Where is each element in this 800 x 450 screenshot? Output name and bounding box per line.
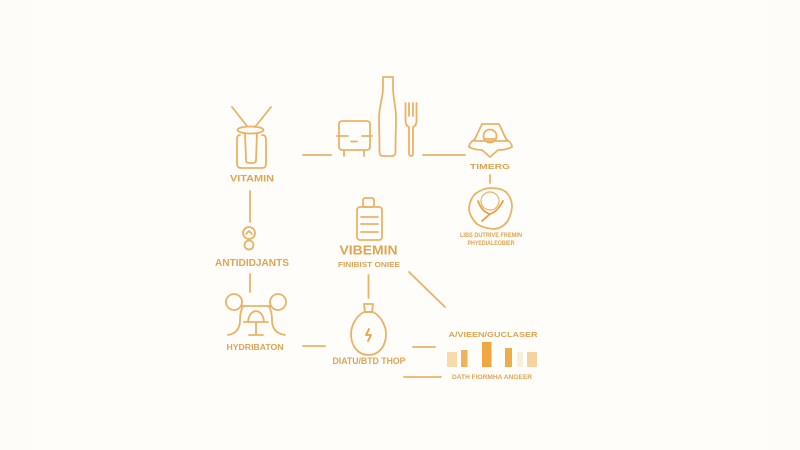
label: round icon caption: [460, 233, 522, 247]
label: round icon caption: LIBS DUTRIVE FREMIN: [460, 233, 522, 239]
label: bar chart caption: DATH FIORMHA ANGEER: [452, 374, 532, 381]
label: central heading: VIBEMIN: [340, 244, 398, 258]
icon: hydration table with round handles: [226, 294, 286, 335]
connector: fiber label to round icon: [489, 175, 491, 183]
icon: flask with bolt: [351, 304, 386, 355]
connector: hydration to flask: [303, 345, 325, 347]
icon: fork: [406, 103, 416, 156]
label: round icon caption: PHYEDIALEOBIER: [468, 241, 515, 247]
connector: flask to bar chart: [413, 346, 435, 348]
label: bar chart title: A/VIEEN/GUCLASER: [448, 330, 538, 339]
icon: food cover badge: [469, 124, 512, 157]
label: antioxidants: ANTIDIDJANTS: [215, 257, 289, 269]
connector: vitamin to robot: [303, 154, 331, 156]
icon: square food box: [337, 121, 372, 156]
connector: lower line to bar chart caption: [404, 376, 441, 378]
connector: diagonal to bar chart: [409, 272, 445, 307]
connector: fork to hat: [423, 154, 465, 156]
label: vitamin: VITAMIN: [230, 174, 274, 184]
icon: round organic shape with bird: [469, 188, 512, 229]
connector: vitamin to antioxidants: [249, 191, 251, 222]
icon: antioxidants molecule: [243, 227, 255, 250]
icon: vitamin drink glass with straws: [232, 107, 271, 168]
label: central subheading: FINIBIST ONIEE: [338, 260, 400, 269]
icon: bottle: [379, 77, 396, 156]
bar chart: [447, 342, 537, 367]
label: hydration: HYDRIBATON: [226, 343, 284, 352]
connector: antioxidants to hydration: [249, 274, 251, 292]
label: fiber: TIMERG: [470, 162, 510, 171]
connector: central bottle to flask: [368, 275, 370, 298]
label: flask caption: DIATU/BTD THOP: [332, 356, 406, 366]
icon: central supplement bottle: [357, 198, 382, 240]
